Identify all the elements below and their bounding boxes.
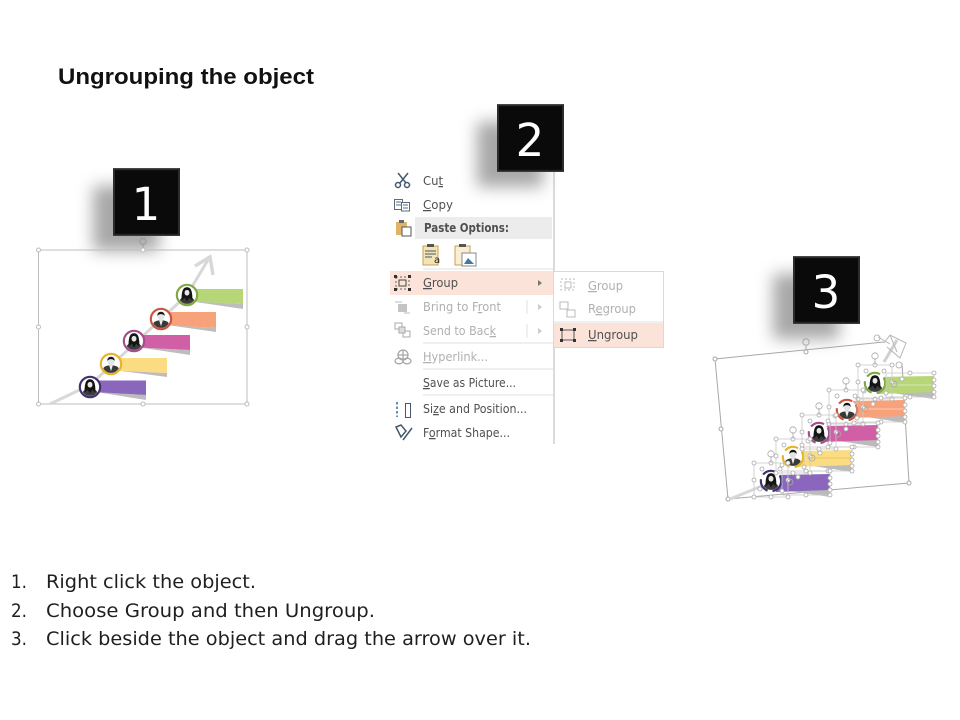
step 1 badge <box>93 168 180 251</box>
panel: step 3 ungrouped graphic <box>713 335 936 501</box>
instructions list: Click beside the object and drag the arrow over it. <box>46 628 531 650</box>
instructions list: Right click the object. <box>46 571 256 593</box>
group row highlight <box>390 271 553 295</box>
icon: paste text: a <box>434 255 440 266</box>
step bar: yellow <box>101 354 167 377</box>
step 2 badge: 2 <box>516 114 544 167</box>
bar: orange <box>837 400 905 423</box>
icon: size and position <box>397 402 410 418</box>
instructions list: 1. <box>11 571 27 593</box>
icon: paste picture <box>455 244 476 266</box>
icon: paste text <box>423 244 440 266</box>
menu item labels: Hyperlink... <box>423 349 488 364</box>
menu right edge <box>553 172 555 444</box>
menu separators <box>423 269 553 395</box>
submenu: Regroup <box>588 301 636 316</box>
menu item labels: Send to Back <box>423 323 497 338</box>
step bar: orange <box>151 309 216 332</box>
icon: bring to front <box>395 302 410 313</box>
step bar: green <box>177 285 243 309</box>
submenu <box>554 272 664 348</box>
step 1 badge: 1 <box>132 178 160 231</box>
icon: submenu group <box>561 279 574 290</box>
instructions list <box>11 571 531 650</box>
menu item labels: Size and Position... <box>423 401 527 416</box>
rotated selection frame <box>713 339 911 501</box>
step bar: purple <box>80 377 146 400</box>
menu item labels: Copy <box>423 197 454 212</box>
step 3 badge: 3 <box>812 266 840 319</box>
icon: cut <box>396 173 410 188</box>
instructions list: 2. <box>11 600 27 622</box>
menu arrows <box>527 280 542 338</box>
submenu: Group <box>588 278 623 293</box>
bar: yellow <box>783 447 852 472</box>
selection frame 1 <box>36 238 249 406</box>
growth arrow <box>50 257 213 404</box>
ghost arrow <box>730 335 906 499</box>
icon: hyperlink <box>395 350 411 364</box>
paste options header background <box>415 217 552 239</box>
menu item labels: Save as Picture... <box>423 375 516 390</box>
bar: green <box>865 373 934 399</box>
title: Ungrouping the object <box>58 64 315 89</box>
step bar: pink <box>124 331 190 355</box>
bar: purple <box>761 471 830 497</box>
selection handle sets <box>752 353 936 499</box>
panel: step 1 original graphic <box>36 238 249 406</box>
step 2 badge <box>477 104 564 187</box>
menu item labels <box>423 173 527 440</box>
menu item labels: Format Shape... <box>423 425 510 440</box>
menu item labels: Group <box>423 275 458 290</box>
icon: send to back <box>395 323 410 337</box>
menu item labels: Paste Options: <box>424 220 509 235</box>
icon: group <box>394 275 411 291</box>
instructions list: Choose Group and then Ungroup. <box>46 600 375 622</box>
step 3 badge <box>773 256 860 339</box>
bar: pink <box>809 423 878 447</box>
menu item labels: Bring to Front <box>423 299 501 314</box>
instructions list: 3. <box>11 628 27 650</box>
icon: copy <box>394 200 410 211</box>
icon: format shape <box>396 425 412 440</box>
panel: step 2 context menu <box>390 172 664 444</box>
icon: paste <box>396 220 411 236</box>
icon: submenu regroup <box>560 302 575 317</box>
icon: submenu ungroup <box>560 328 576 342</box>
menu item labels: Cut <box>423 173 443 188</box>
submenu: Ungroup <box>588 327 638 342</box>
